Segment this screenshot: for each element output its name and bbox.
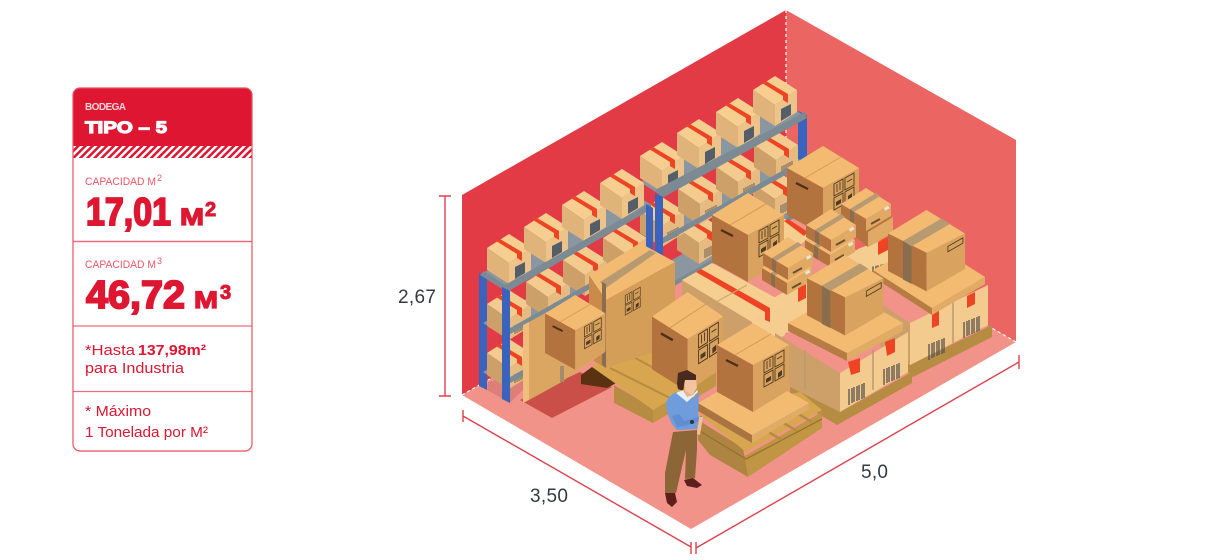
dimension: length 5,0 bbox=[696, 355, 1019, 554]
label: length 5,0: 5,0 bbox=[861, 462, 888, 483]
capacity m2 value: 17,01 bbox=[86, 191, 171, 234]
cream box behind middle cube bbox=[780, 216, 812, 255]
capacity m3 label: CAPACIDAD M bbox=[85, 259, 156, 271]
flat board bbox=[523, 305, 605, 403]
small box stack 3 bbox=[841, 188, 893, 247]
board bbox=[873, 270, 932, 315]
long taped boxes bbox=[682, 263, 806, 355]
note: industria: 137,98m² bbox=[138, 342, 206, 359]
divider bbox=[73, 240, 252, 242]
small box stack 2 bbox=[805, 209, 856, 267]
front pallet with cube bbox=[698, 323, 822, 477]
note: industria: *Hasta bbox=[85, 342, 136, 359]
note: industria: para Industria bbox=[85, 360, 185, 377]
right wall bbox=[786, 10, 1016, 342]
tall box bbox=[589, 243, 675, 368]
shelving unit: left bbox=[479, 169, 653, 403]
pallet behind person bbox=[581, 330, 720, 423]
pallet bbox=[880, 325, 992, 377]
dimension: height bbox=[439, 196, 451, 396]
taped cube right bbox=[888, 210, 965, 291]
cube: hanging bbox=[545, 295, 605, 370]
note: maximo: 1 Tonelada por M² bbox=[85, 424, 208, 441]
label: height 2,67: 2,67 bbox=[398, 287, 436, 308]
red tag and barcode back bbox=[873, 237, 888, 276]
capacity m3 value bbox=[86, 274, 231, 317]
capacity m3 value: 3 bbox=[220, 282, 231, 304]
person bbox=[665, 370, 703, 507]
header title: TIPO – 5 bbox=[85, 118, 167, 137]
note: maximo bbox=[85, 403, 208, 441]
right pallet group bbox=[873, 210, 992, 377]
boxes bbox=[875, 300, 910, 365]
cube: back bbox=[787, 146, 859, 235]
label: width 3,50: 3,50 bbox=[530, 486, 568, 507]
capacity m2 value: M bbox=[180, 204, 204, 231]
shelving unit: right bbox=[640, 76, 807, 293]
note: industria bbox=[85, 342, 206, 377]
cube: middle bbox=[712, 193, 784, 282]
divider bbox=[73, 390, 252, 392]
dimension: width 3,50 bbox=[463, 410, 691, 554]
capacity m3 value: 46,72 bbox=[86, 274, 185, 317]
storage room illustration bbox=[462, 10, 1016, 529]
capacity m2 label: 2 bbox=[157, 173, 162, 183]
capacity m2 value: 2 bbox=[205, 199, 216, 221]
left wall bbox=[462, 10, 786, 395]
capacity m2 label: CAPACIDAD M bbox=[85, 176, 156, 188]
capacity m3 value: M bbox=[194, 287, 218, 314]
back boxes group bbox=[682, 146, 893, 355]
header label: BODEGA bbox=[85, 102, 126, 113]
shelf shadow bbox=[487, 373, 523, 403]
panel border bbox=[73, 88, 252, 451]
divider bbox=[73, 325, 252, 327]
note: maximo: * Máximo bbox=[85, 403, 151, 420]
panel: bodega tipo 5 bbox=[73, 88, 252, 451]
floor bbox=[462, 210, 1016, 529]
capacity m3 label: 3 bbox=[157, 256, 162, 266]
floor shadow bbox=[520, 372, 612, 418]
panel header bbox=[73, 88, 252, 158]
cube: behind person bbox=[652, 292, 723, 392]
small box stack 1 bbox=[762, 237, 813, 295]
center pallet group bbox=[775, 255, 912, 425]
